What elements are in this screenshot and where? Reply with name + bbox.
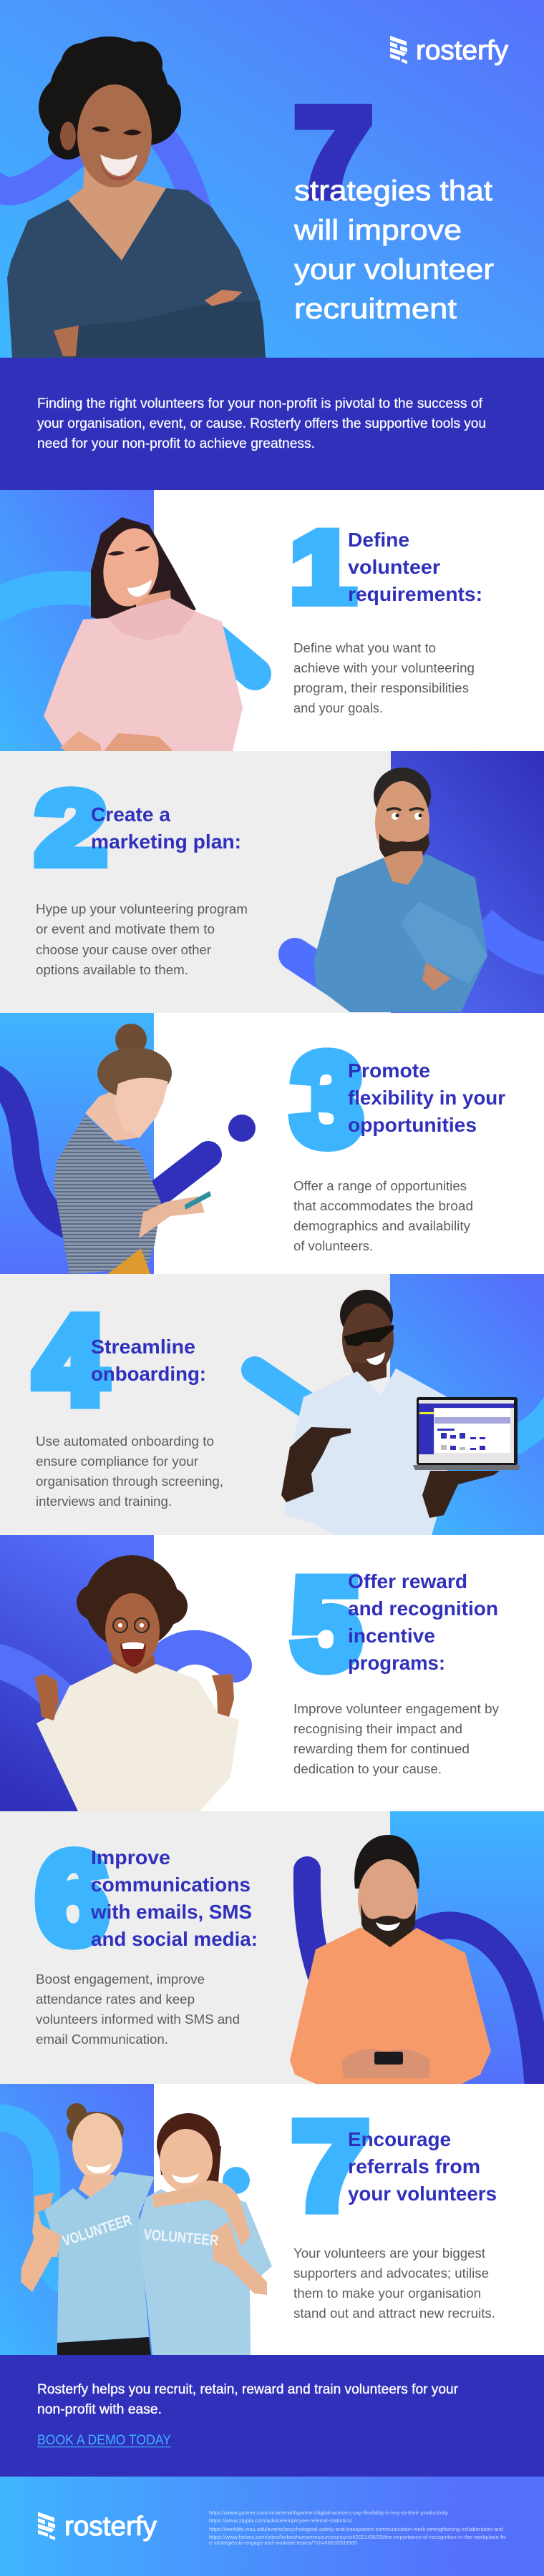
- panel: strategy 6: [0, 1811, 544, 2089]
- body text: [293, 1701, 500, 1776]
- panel: strategy 3: [0, 1013, 544, 1274]
- body text: organisation through screening,: [36, 1474, 223, 1489]
- decorative waves: [0, 1647, 235, 1706]
- link: book a demo: BOOK A DEMO TODAY: [37, 2433, 171, 2448]
- panel: strategy 4: [0, 1274, 544, 1535]
- intro text: your organisation, event, or cause. Rosterfy offers the supportive tools you: [37, 416, 486, 431]
- intro text: Finding the right volunteers for your non-profit is pivotal to the success of: [37, 396, 483, 411]
- references: e-strategies-to-engage-and-motivate-teams/?sh=6661f2fd3565: [209, 2540, 357, 2546]
- photo: man with laptop: [281, 1290, 520, 1535]
- body text: [293, 640, 475, 715]
- heading numeral: 4: 4: [35, 1291, 106, 1429]
- heading: Offer reward: [348, 1570, 467, 1592]
- photo: woman in pink hoodie: [44, 517, 243, 751]
- heading numeral: 7: 7: [296, 84, 371, 221]
- title: recruitment: [294, 293, 457, 325]
- body text: of volunteers.: [293, 1238, 373, 1253]
- heading: onboarding:: [91, 1363, 206, 1385]
- body text: Offer a range of opportunities: [293, 1178, 467, 1193]
- title: your volunteer: [294, 254, 494, 285]
- photo: two volunteers giving thumbs up: [21, 2103, 272, 2355]
- references: https://www.zippia.com/advice/employee-referral-statistics/: [209, 2517, 353, 2524]
- body text: [36, 1972, 240, 2047]
- shirt lettering: VOLUNTEER: [60, 2212, 134, 2250]
- body text: Your volunteers are your biggest: [293, 2246, 485, 2261]
- logo: rosterfy: rosterfy: [64, 2512, 157, 2542]
- body text: rewarding them for continued: [293, 1741, 470, 1756]
- heading: and social media:: [91, 1928, 258, 1950]
- heading: communications: [91, 1874, 251, 1896]
- decorative bands: [307, 1870, 538, 2089]
- heading: Promote: [348, 1059, 430, 1082]
- heading: Define: [348, 529, 409, 551]
- shirt lettering: VOLUNTEER: [143, 2226, 219, 2249]
- body text: supporters and advocates; utilise: [293, 2266, 489, 2281]
- decorative curve and stick: [0, 588, 255, 674]
- panel: strategy 1: [0, 490, 544, 751]
- decorative squiggle, stick and dot: [0, 1077, 256, 1227]
- closing text: Rosterfy helps you recruit, retain, reward and train volunteers for your: [37, 2382, 459, 2397]
- decorative curve and stick: [295, 921, 544, 981]
- panel: strategy 7: [0, 2084, 544, 2355]
- heading: and recognition: [348, 1597, 498, 1620]
- references: https://worklife.msu.edu/events/psychological-safety-and-transparent-communication-work-strengthening-collaboration-and: [209, 2526, 503, 2532]
- heading: marketing plan:: [91, 831, 241, 853]
- photo: thinking man in denim shirt: [314, 768, 487, 1012]
- body text: them to make your organisation: [293, 2286, 481, 2301]
- heading: your volunteers: [348, 2183, 497, 2205]
- body text: [293, 2246, 495, 2321]
- body text: that accommodates the broad: [293, 1198, 473, 1213]
- logo: rosterfy: rosterfy: [416, 36, 508, 66]
- title: [293, 175, 494, 325]
- panel: strategy 2: [0, 751, 544, 1013]
- heading: incentive: [348, 1625, 435, 1647]
- photo: woman looking at phone: [54, 1024, 211, 1274]
- photo: smiling man in orange sweater: [290, 1835, 491, 2084]
- body text: dedication to your cause.: [293, 1761, 442, 1776]
- laptop: [413, 1397, 520, 1470]
- heading numeral: 2: 2: [36, 771, 106, 886]
- heading: programs:: [348, 1652, 445, 1674]
- heading numeral: 7: 7: [293, 2097, 369, 2235]
- panel: hero: [0, 0, 544, 358]
- panel: strategy 5: [0, 1535, 544, 1811]
- body text: Define what you want to: [293, 640, 436, 655]
- shirt lettering: [60, 2212, 219, 2250]
- panel: footer: [0, 2477, 544, 2576]
- heading: Streamline: [91, 1336, 195, 1358]
- heading: [348, 529, 482, 605]
- heading: [91, 1336, 206, 1385]
- body text: or event and motivate them to: [36, 921, 215, 936]
- heading numeral: 6: 6: [37, 1827, 108, 1970]
- closing text: [37, 2382, 459, 2417]
- heading: [90, 1846, 258, 1950]
- closing text: non-profit with ease.: [37, 2402, 162, 2417]
- body text: Hype up your volunteering program: [36, 901, 248, 916]
- heading: with emails, SMS: [90, 1901, 252, 1923]
- heading: [348, 2128, 497, 2205]
- heading: volunteer: [348, 556, 440, 578]
- body text: interviews and training.: [36, 1494, 172, 1509]
- body text: achieve with your volunteering: [293, 660, 475, 675]
- heading numeral: 3: 3: [292, 1027, 362, 1171]
- body text: Use automated onboarding to: [36, 1434, 214, 1449]
- body text: options available to them.: [36, 962, 188, 977]
- body text: recognising their impact and: [293, 1721, 462, 1736]
- heading: Encourage: [348, 2128, 451, 2150]
- heading: referrals from: [348, 2155, 480, 2178]
- references: [209, 2509, 506, 2546]
- heading: flexibility in your: [348, 1087, 505, 1109]
- body text: [36, 901, 248, 977]
- panel: call to action: [0, 2355, 544, 2477]
- body text: email Communication.: [36, 2032, 168, 2047]
- body text: program, their responsibilities: [293, 680, 469, 695]
- body text: volunteers informed with SMS and: [36, 2012, 240, 2027]
- heading numeral: 1: 1: [291, 511, 355, 624]
- body text: attendance rates and keep: [36, 1992, 195, 2007]
- body text: [36, 1434, 223, 1509]
- decorative arc and dot: [0, 2117, 250, 2286]
- title: strategies that: [294, 175, 492, 207]
- body text: choose your cause over other: [36, 942, 211, 957]
- title: will improve: [293, 215, 462, 246]
- heading: [348, 1570, 498, 1674]
- heading numeral: 5: 5: [292, 1553, 361, 1695]
- heading: [348, 1059, 505, 1136]
- decorative stick and curve: [255, 1370, 544, 1459]
- heading: Improve: [91, 1846, 170, 1869]
- heading: opportunities: [348, 1114, 477, 1136]
- decorative squiggle behind hero person: [0, 124, 199, 215]
- body text: stand out and attract new recruits.: [293, 2306, 495, 2321]
- heading: Create a: [91, 803, 170, 826]
- body text: Boost engagement, improve: [36, 1972, 205, 1987]
- body text: [293, 1178, 473, 1253]
- intro text: need for your non-profit to achieve greatness.: [37, 436, 315, 451]
- photo: excited woman in cream sweater: [34, 1555, 239, 1811]
- references: https://www.gartner.com/smarterwithgartner/digital-workers-say-flexibility-is-key-to-their-productivity: [209, 2509, 448, 2516]
- references: https://www.forbes.com/sites/forbeshumanresourcescouncil/2021/08/25/the-importance-of-recognition-in-the-workplace-fiv: [209, 2534, 506, 2540]
- body text: and your goals.: [293, 700, 383, 715]
- photo: smiling woman in navy sweater: [7, 36, 266, 358]
- heading: requirements:: [348, 583, 482, 605]
- heading: [91, 803, 241, 853]
- body text: ensure compliance for your: [36, 1454, 198, 1469]
- body text: demographics and availability: [293, 1218, 471, 1233]
- panel: intro: [0, 358, 544, 490]
- intro text: [37, 396, 486, 451]
- body text: Improve volunteer engagement by: [293, 1701, 500, 1716]
